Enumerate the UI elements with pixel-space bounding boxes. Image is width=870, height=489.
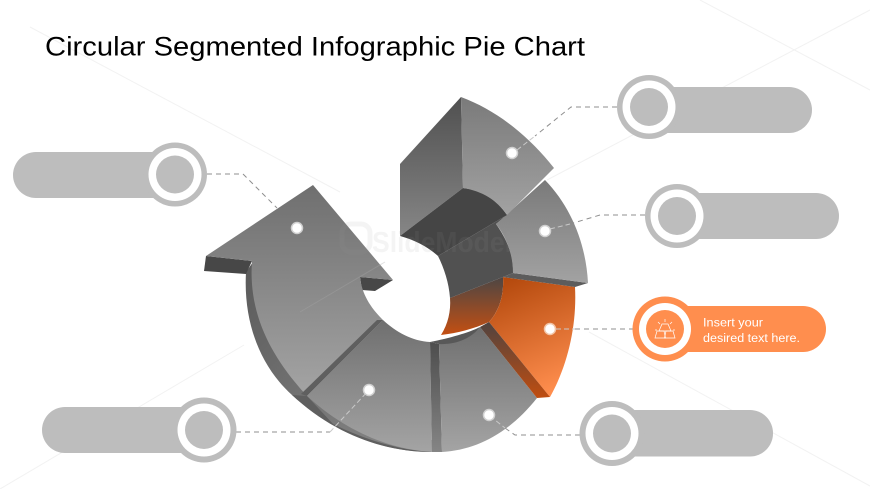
segment 2: bottom left [307,320,432,452]
arrow to segment 2 divider [301,320,383,396]
divider between segments 2 and 3 [430,342,442,452]
callout text: desired text here. [703,333,800,345]
arrow right wing side [360,277,393,291]
left end face [400,97,463,236]
lower lip [503,273,588,287]
segment 3: bottom right [439,327,537,452]
orange top face [489,277,575,397]
segment 5: upper right gray [438,180,588,298]
callout: left [13,142,207,206]
top face [461,97,554,215]
title: Circular Segmented Infographic Pie Chart [45,32,586,62]
arrow left wing side [204,256,252,274]
inner shadow under segment 3 [430,327,480,344]
3D circular arrow chart [204,97,588,452]
watermark: .com [516,244,536,254]
icon: stacked gold bars [655,319,675,338]
segment 2 outer wall sliver [292,395,432,452]
callout: right [645,184,839,248]
top face [496,180,588,283]
orange divider wall [480,322,550,398]
segment 4: orange highlighted [441,277,575,398]
outer side wall of arrow and bottom-left segment [246,262,432,452]
callout: top right [617,75,812,139]
marker dots [292,148,556,420]
arrow top face [206,185,393,396]
inner dark wall [400,188,507,256]
faint line crossing the chart [300,262,385,312]
callout: bottom [580,401,773,466]
connector lines [207,107,645,435]
chart surface connector lines [330,136,575,432]
watermark: SlideModel [372,227,512,259]
callout: bottom left [42,398,236,462]
callout: orange highlighted [632,296,826,362]
callout text: Insert your [703,318,763,330]
orange inner wall [441,277,503,335]
inner wall [438,215,513,298]
segment 6: top block [400,97,554,256]
segment 1: arrow [204,185,393,396]
